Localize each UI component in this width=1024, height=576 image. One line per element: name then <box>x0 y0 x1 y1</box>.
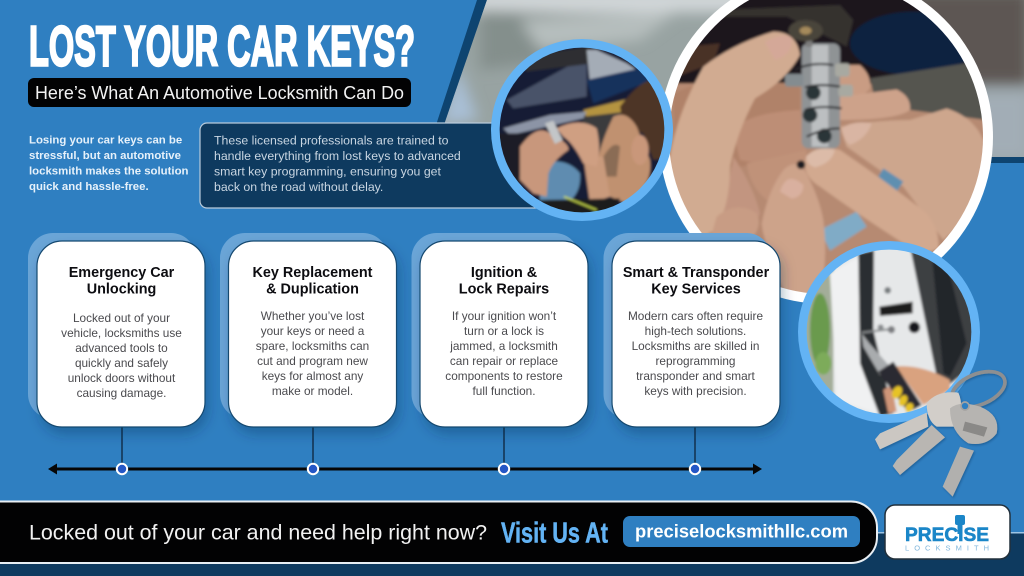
call to action bar <box>0 502 877 563</box>
card: ignition and lock repairs: turn or a lock is <box>464 324 544 338</box>
photo: hands holding lock pick tool <box>659 0 993 304</box>
card: smart and transponder key services: Modern cars often require <box>628 309 763 323</box>
call to action bar: Locked out of your car and need help right now? <box>29 522 487 544</box>
logo: LOCKSMITH <box>905 544 989 552</box>
card: key replacement and duplication <box>220 233 396 427</box>
card: smart and transponder key services: Key Services <box>651 282 741 298</box>
card: emergency car unlocking: vehicle, locksmiths use <box>61 326 182 340</box>
intro text: Losing your car keys can be <box>29 134 182 146</box>
card: emergency car unlocking: Emergency Car <box>69 265 175 281</box>
photo: locksmith at car door <box>491 39 673 221</box>
icon: bunch of keys <box>875 365 1010 497</box>
subtitle: Here’s What An Automotive Locksmith Can Do <box>35 83 404 103</box>
card: key replacement and duplication: & Duplication <box>266 282 359 298</box>
photo: hand using screwdriver on door latch <box>798 241 980 423</box>
card: smart and transponder key services: transponder and smart <box>636 369 756 383</box>
subtitle <box>28 78 411 107</box>
card: emergency car unlocking <box>28 233 205 427</box>
card: key replacement and duplication: Whether you’ve lost <box>261 309 365 323</box>
timeline <box>48 427 762 474</box>
card: smart and transponder key services: high-tech solutions. <box>645 324 746 338</box>
card: smart and transponder key services: Locksmiths are skilled in <box>632 339 759 353</box>
intro text: locksmith makes the solution <box>29 166 189 178</box>
card: ignition and lock repairs: Lock Repairs <box>459 282 549 298</box>
intro text <box>29 134 189 193</box>
icon: logo key <box>955 515 965 534</box>
card: ignition and lock repairs: full function. <box>473 384 535 398</box>
card: emergency car unlocking: causing damage. <box>77 386 166 400</box>
card: ignition and lock repairs: jammed, a locksmith <box>449 339 558 353</box>
panel: licensed professionals: back on the road without delay. <box>214 180 383 194</box>
logo: PRECISE <box>905 525 989 546</box>
card: smart and transponder key services <box>604 233 780 427</box>
intro text: quick and hassle-free. <box>29 181 149 193</box>
card: key replacement and duplication: keys for almost any <box>262 369 363 383</box>
card: key replacement and duplication: Key Replacement <box>253 265 373 281</box>
title: LOST YOUR CAR KEYS? <box>29 14 415 78</box>
card: smart and transponder key services: keys with precision. <box>644 384 747 398</box>
card: ignition and lock repairs: If your ignition won’t <box>452 309 557 323</box>
card: smart and transponder key services: reprogramming <box>656 354 736 368</box>
card: ignition and lock repairs <box>412 233 588 427</box>
card: smart and transponder key services: Smart & Transponder <box>623 265 770 281</box>
panel: licensed professionals: handle everything from lost keys to advanced <box>214 149 461 163</box>
card: key replacement and duplication: spare, locksmiths can <box>256 339 369 353</box>
card: ignition and lock repairs: Ignition & <box>471 265 537 281</box>
card: emergency car unlocking: Locked out of your <box>73 311 170 325</box>
card: emergency car unlocking: quickly and safely <box>75 356 168 370</box>
intro text: stressful, but an automotive <box>29 150 181 162</box>
card: ignition and lock repairs: components to restore <box>445 369 563 383</box>
call to action bar: Visit Us At <box>501 518 608 550</box>
panel: licensed professionals: These licensed professionals are trained to <box>214 134 449 148</box>
logo <box>885 505 1010 559</box>
card: key replacement and duplication: cut and program new <box>257 354 368 368</box>
header background photo <box>437 0 1024 163</box>
card: key replacement and duplication: make or model. <box>272 384 353 398</box>
call to action bar: preciselocksmithllc.com <box>635 522 848 542</box>
card: emergency car unlocking: unlock doors without <box>68 371 176 385</box>
card: ignition and lock repairs: can repair or replace <box>450 354 559 368</box>
card: emergency car unlocking: advanced tools to <box>75 341 168 355</box>
panel: licensed professionals <box>200 123 550 208</box>
panel: licensed professionals: smart key programming, ensuring you get <box>214 164 441 178</box>
card: key replacement and duplication: your keys or need a <box>261 324 365 338</box>
card: emergency car unlocking: Unlocking <box>87 282 156 298</box>
